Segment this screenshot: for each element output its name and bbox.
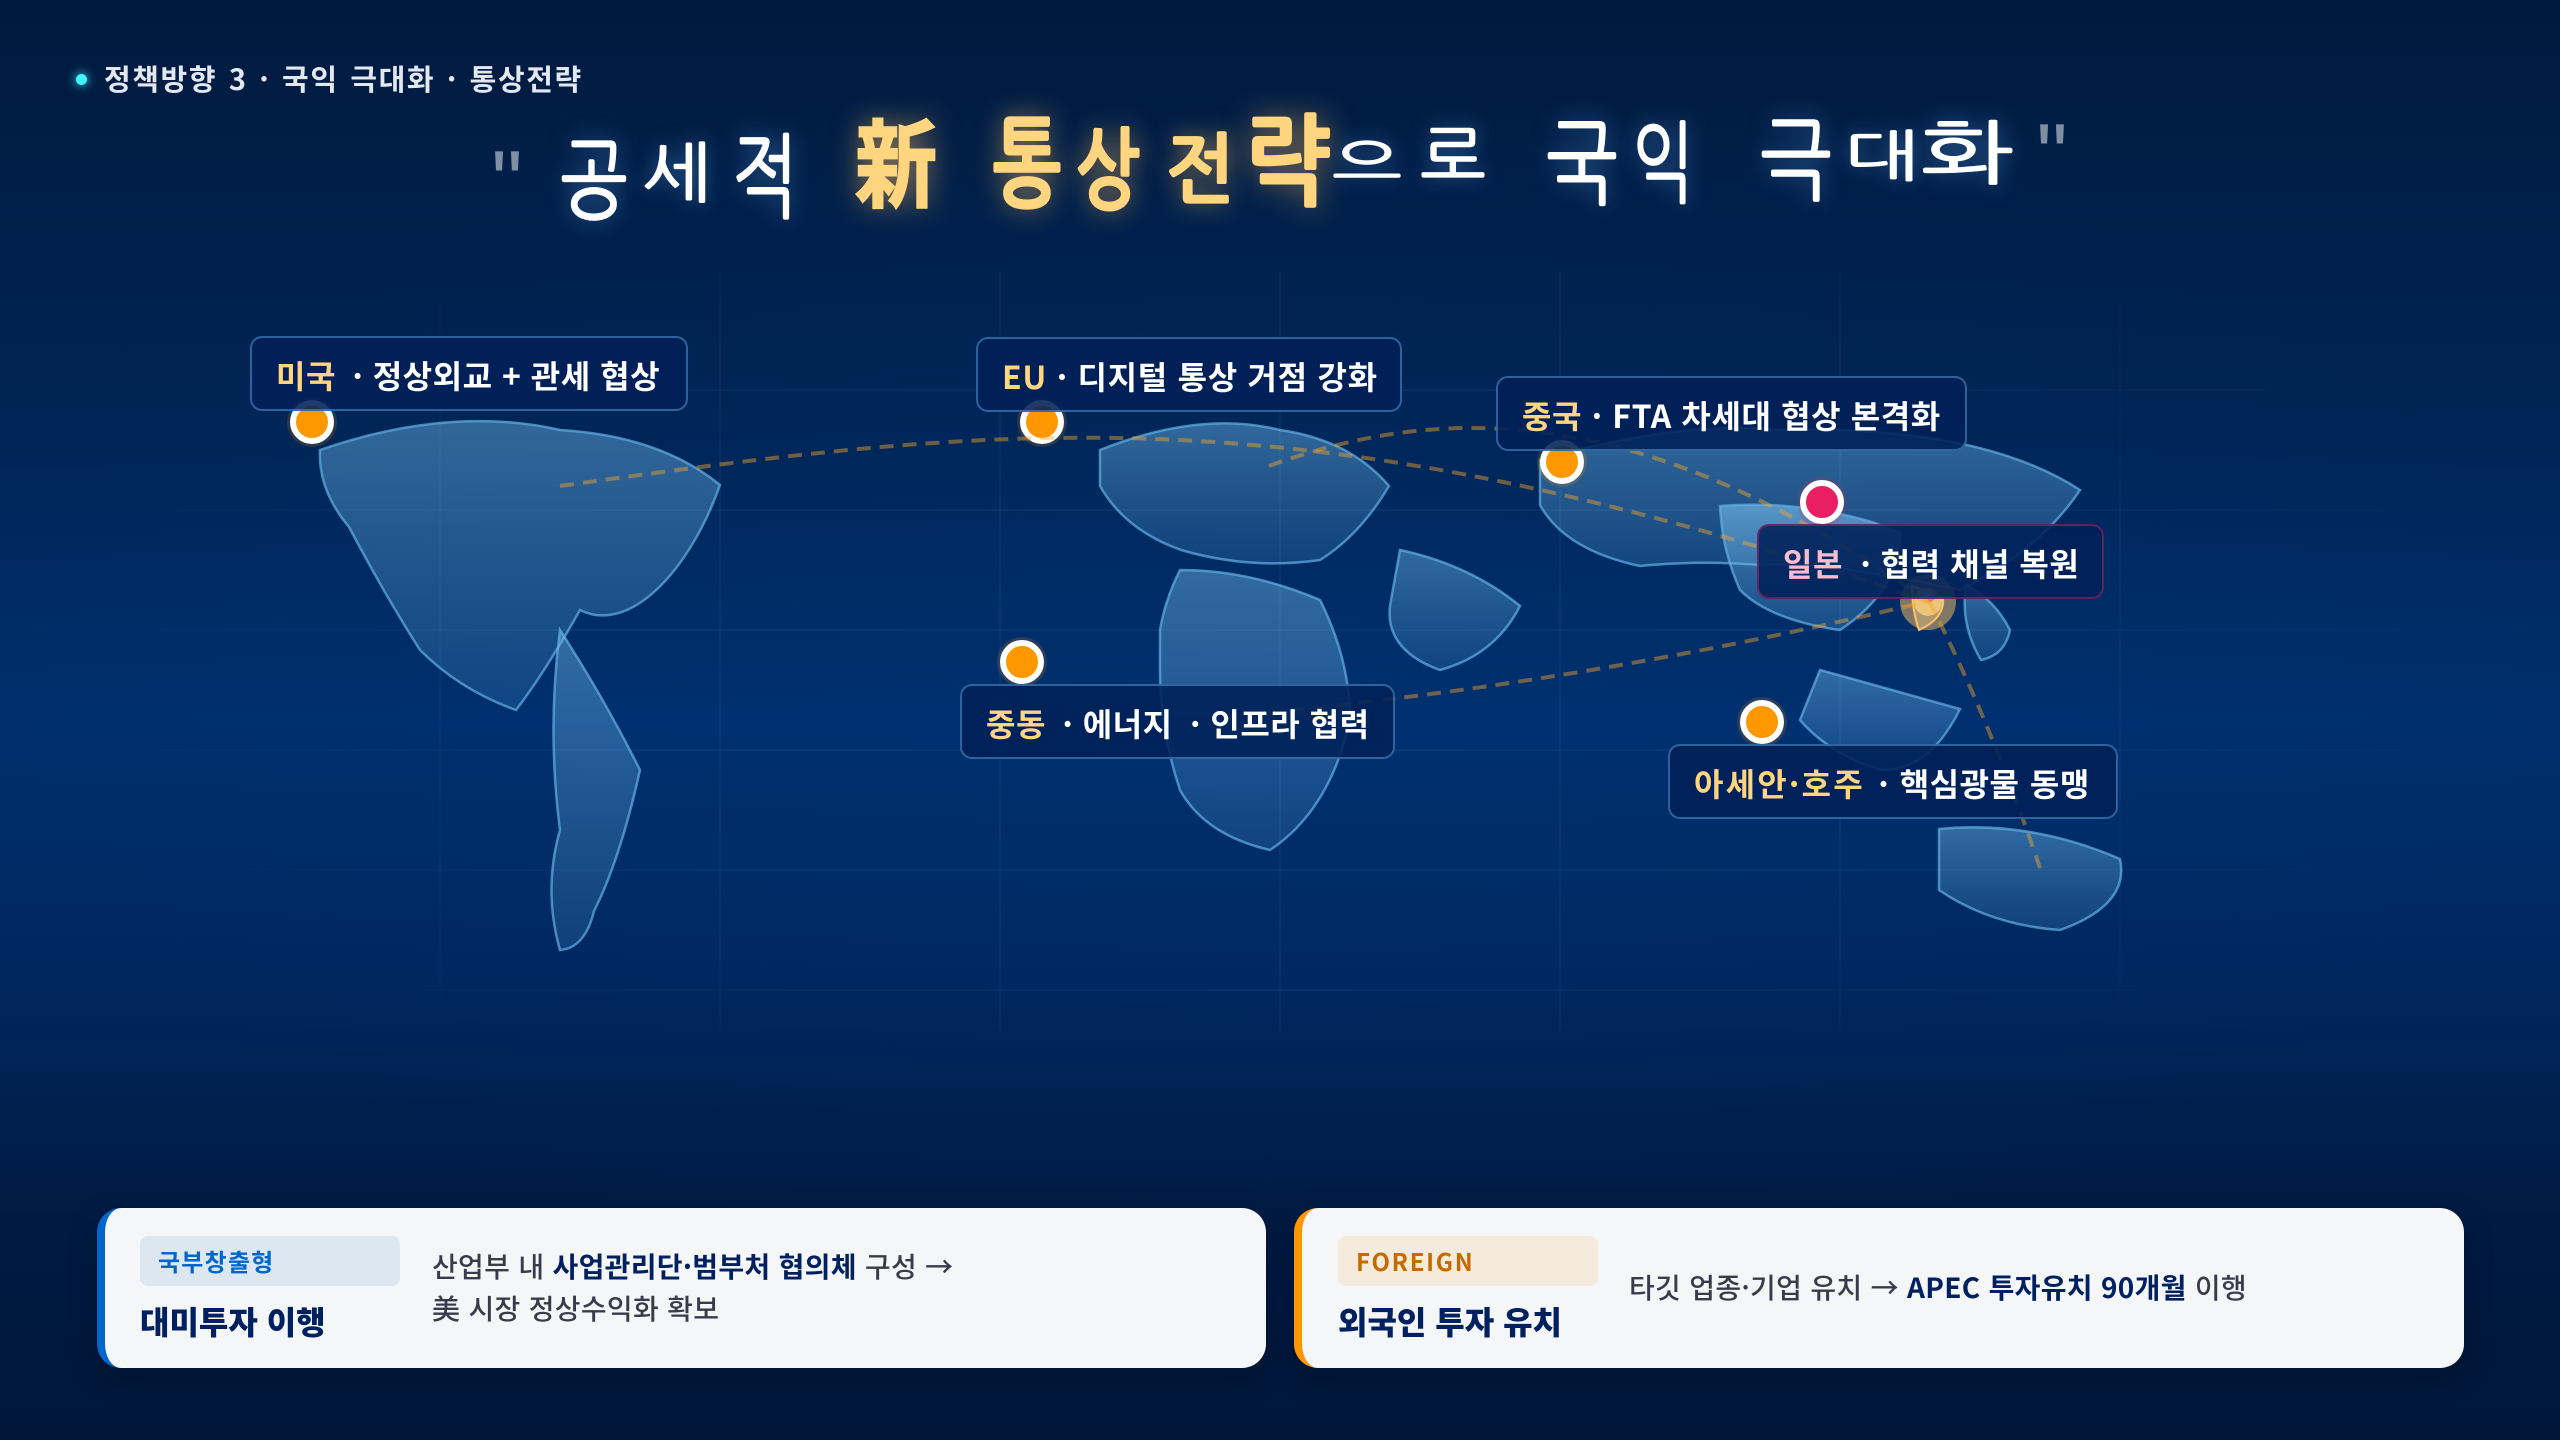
title: 대 xyxy=(1844,128,1920,184)
title: 新 xyxy=(855,120,937,215)
marker: Middle East xyxy=(997,637,1047,687)
continents xyxy=(320,421,2121,950)
description xyxy=(432,1246,953,1328)
Southeast Asia xyxy=(1800,670,1960,770)
label: Japan xyxy=(1757,524,2104,599)
section eyebrow: 정책방향 3 · 국익 극대화 · 통상전략 xyxy=(104,57,583,99)
marker: ASEAN xyxy=(1737,697,1787,747)
title: 략 xyxy=(1244,115,1330,212)
title: 국 xyxy=(1546,117,1618,209)
title: 전 xyxy=(1166,133,1234,208)
panel heading: 대미투자 이행 xyxy=(140,1298,326,1344)
description: 산업부 내 사업관리단·범부처 협의체 구성 → xyxy=(432,1246,953,1286)
title: " xyxy=(491,132,523,231)
Asia xyxy=(1540,428,2080,590)
marker: China xyxy=(1537,437,1587,487)
world map xyxy=(287,271,2122,998)
South America xyxy=(552,630,640,950)
label: Japan: 일본 · 협력 채널 복원 xyxy=(1783,540,2079,586)
title: 공 xyxy=(560,137,628,223)
title: 익 xyxy=(1632,119,1694,207)
trade routes xyxy=(560,428,2040,868)
Korea highlight xyxy=(1900,574,1956,630)
title: 로 xyxy=(1420,123,1486,191)
title: 통 xyxy=(993,117,1061,213)
Europe xyxy=(1100,423,1389,563)
label: Middle East: 중동 · 에너지 · 인프라 협력 xyxy=(986,700,1370,746)
tag: national wealth xyxy=(140,1236,400,1286)
label: China xyxy=(1496,376,1967,451)
description: 美 시장 정상수익화 확보 xyxy=(432,1288,719,1328)
title: 으 xyxy=(1332,136,1402,188)
label: EU xyxy=(976,337,1402,412)
label: USA xyxy=(250,336,688,411)
description: 타깃 업종·기업 유치 → APEC 투자유치 90개월 이행 xyxy=(1629,1267,2247,1307)
label: ASEAN and Australia: 아세안·호주 · 핵심광물 동맹 xyxy=(1694,760,2090,806)
marker: EU xyxy=(1017,397,1067,447)
label: Middle East xyxy=(960,684,1395,759)
panel heading: 외국인 투자 유치 xyxy=(1338,1298,1562,1344)
title xyxy=(491,98,2068,231)
tag: foreign xyxy=(1338,1236,1598,1286)
Africa xyxy=(1160,570,1350,850)
title: 상 xyxy=(1077,128,1139,215)
title: 극 xyxy=(1760,116,1832,204)
title: 화 xyxy=(1921,118,2013,188)
marker: USA xyxy=(287,397,337,447)
Australia xyxy=(1939,827,2121,930)
label: EU: EU · 디지털 통상 거점 강화 xyxy=(1002,353,1378,399)
tag: foreign: FOREIGN xyxy=(1356,1243,1474,1278)
tag: national wealth: 국부창출형 xyxy=(158,1243,274,1278)
North America xyxy=(320,421,720,710)
India and South Asia xyxy=(1720,505,1900,630)
label: USA: 미국 · 정상외교 + 관세 협상 xyxy=(276,352,660,398)
Middle East xyxy=(1390,550,1520,670)
label: China: 중국 · FTA 차세대 협상 본격화 xyxy=(1522,392,1941,438)
panel: US investment xyxy=(97,1208,1266,1368)
Japan island xyxy=(1965,585,2010,660)
marker: Japan xyxy=(1797,477,1847,527)
panel: foreign investment xyxy=(1294,1208,2464,1368)
title: " xyxy=(2036,105,2068,204)
title: 세 xyxy=(642,140,712,206)
label: ASEAN and Australia xyxy=(1668,744,2118,819)
title: 적 xyxy=(732,131,798,223)
